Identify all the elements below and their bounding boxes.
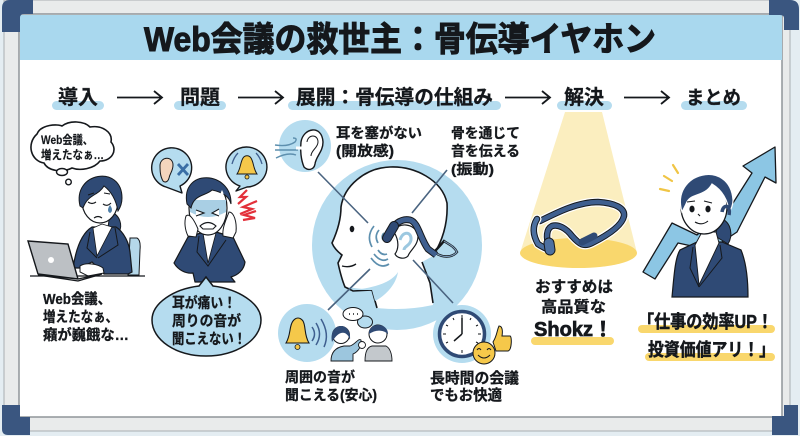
icon: headphones product: [534, 202, 624, 250]
arrow: 解決 to まとめ: [624, 91, 669, 104]
heading: 解決: 解決: [564, 86, 604, 109]
speech bubble: pain message: 耳が痛い！: [172, 294, 236, 312]
icon: corner bottom right: [772, 405, 798, 435]
face details: [342, 264, 356, 267]
icon: laptop: [28, 241, 145, 281]
spotlight: [520, 112, 637, 253]
head profile: [332, 167, 447, 309]
text: summary quote: [638, 312, 775, 361]
icon: corner top left: [2, 0, 33, 32]
callout: vibration: 音を伝える: [451, 143, 520, 159]
callout: surrounding sound: 周囲の音が: [285, 368, 355, 386]
callout: vibration: [451, 125, 520, 177]
spotlight pool: [520, 238, 637, 268]
thought bubble: [31, 122, 114, 185]
speech bubble: ear blocked: [152, 148, 192, 193]
speech bubble: pain message: 聞こえない！: [172, 331, 246, 348]
heading: まとめ: まとめ: [686, 88, 741, 109]
panel: title band: [20, 15, 782, 60]
speech bubble: pain message: [152, 277, 261, 356]
text: intro caption: 増えたなぁ、: [43, 308, 118, 326]
icon: corner bottom left: [2, 405, 30, 435]
person smiling with headphones: [672, 174, 748, 297]
text: Shokz recommendation: Shokz！: [534, 319, 613, 341]
callout: open ear: 耳を塞がない: [336, 124, 422, 142]
background circle: [312, 160, 482, 330]
panel: summary: [638, 147, 776, 361]
callout: comfort in long meetings: でもお快適: [430, 386, 502, 404]
callout: open ear: (開放感): [336, 142, 394, 160]
speech bubble: bell: [226, 147, 267, 191]
callout: open ear: [275, 120, 422, 172]
text: Shokz recommendation: 高品質な: [541, 298, 606, 316]
text: summary quote: 投資価値アリ！」: [648, 340, 775, 360]
arrow: 導入 to 問題: [117, 91, 162, 104]
people talking: [331, 308, 392, 361]
callout: vibration: (振動): [451, 161, 494, 177]
callout: surrounding sound: 聞こえる(安心): [285, 386, 377, 404]
worried person at laptop: [73, 176, 140, 276]
callout: surrounding sound: [278, 304, 392, 404]
sound waves: [369, 226, 389, 266]
speech bubble: pain message: 周りの音が: [172, 312, 241, 330]
title: Web会議の救世主：骨伝導イヤホン: [144, 21, 656, 59]
callout: comfort in long meetings: [430, 305, 519, 404]
icon: corner top right: [769, 0, 799, 30]
person covering ears: [174, 178, 245, 282]
panel: introduction scene: [28, 122, 145, 344]
arrow: 問題 to 展開: [238, 91, 283, 104]
arrow: 展開 to 解決: [505, 91, 550, 104]
text: intro caption: 癪が巍餓な…: [43, 326, 129, 344]
callout: comfort in long meetings: 長時間の会議: [430, 369, 519, 387]
icon: yellow sparkle marks: [660, 165, 678, 191]
text: summary quote: 「仕事の効率UP！: [638, 312, 773, 332]
heading: 展開: 展開：骨伝導の仕組み: [296, 85, 493, 109]
thought bubble: Web会議、: [41, 132, 93, 147]
icon: thumbs up: [493, 326, 511, 351]
panel: bone conduction mechanism: [275, 120, 520, 404]
heading: 問題: 問題: [180, 87, 220, 109]
text: Shokz recommendation: [531, 278, 614, 345]
text: Shokz recommendation: おすすめは: [535, 278, 613, 296]
icon: red pain bolts: [238, 190, 257, 220]
icon: smile: [473, 342, 495, 364]
panel: solution: [520, 112, 637, 345]
arrow: rising growth: [643, 147, 776, 279]
ear with headphone: [387, 220, 457, 258]
eye: [350, 226, 354, 232]
neck shadow: [353, 272, 398, 301]
callout: vibration: 骨を通じて: [451, 125, 520, 141]
heading: 導入: 導入: [58, 85, 98, 109]
heading: 解決: [557, 86, 612, 110]
text: intro caption: Web会議、: [43, 290, 111, 308]
thought bubble: 増えたなぁ…: [41, 147, 104, 162]
panel: problem scene: [152, 147, 267, 356]
text: intro caption: [43, 290, 129, 344]
connector lines: [318, 170, 453, 310]
heading: 導入: [52, 85, 104, 110]
